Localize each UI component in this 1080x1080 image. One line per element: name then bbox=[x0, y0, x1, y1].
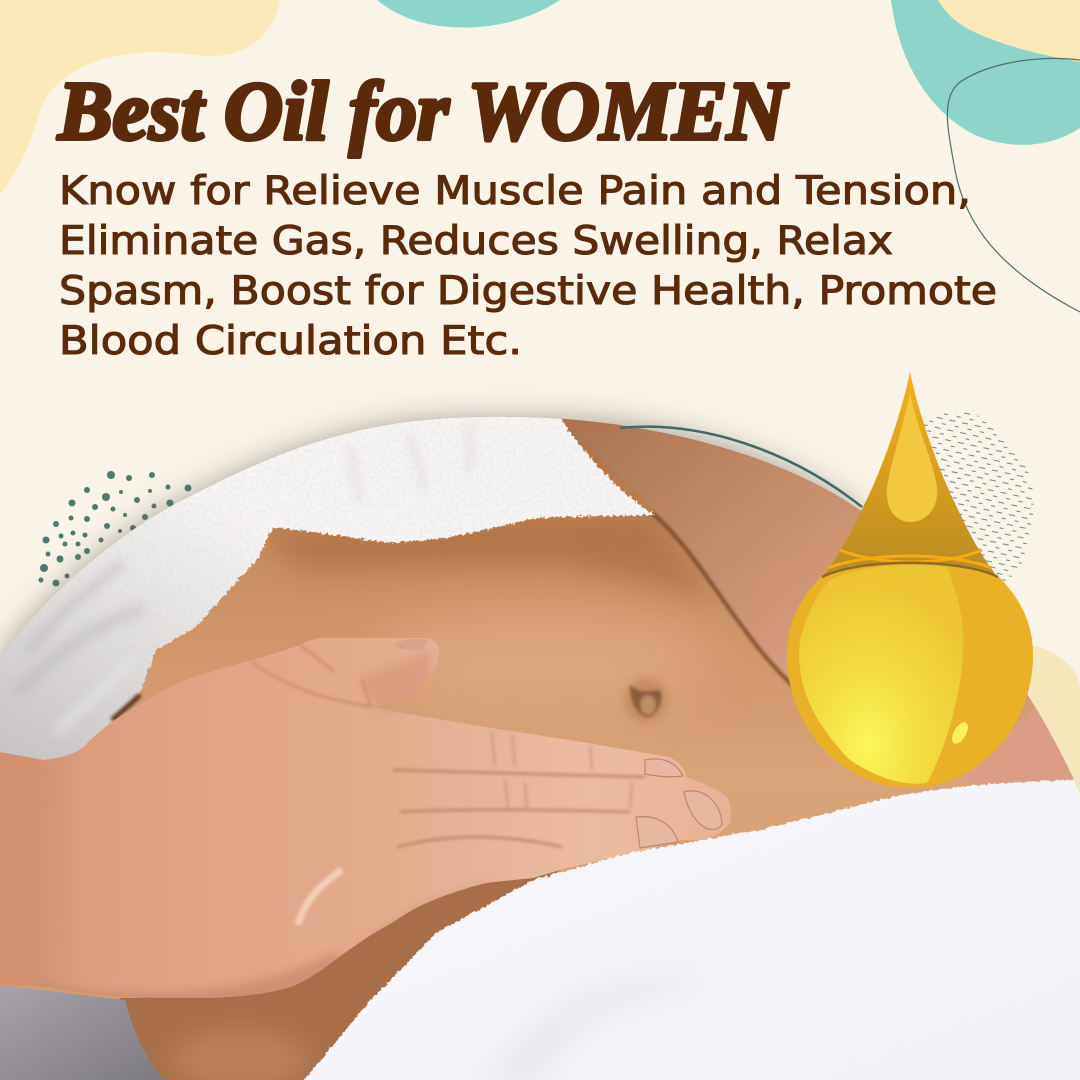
dots: right stipple bbox=[923, 412, 1033, 582]
bottom towel bbox=[300, 780, 1080, 1080]
massaging hand bbox=[0, 630, 740, 1010]
lower belly bbox=[120, 870, 560, 1080]
knuckle creases bbox=[492, 732, 632, 808]
dots: left cluster bbox=[38, 471, 192, 586]
belly glow bbox=[398, 605, 692, 702]
arm crease bbox=[652, 513, 800, 692]
finger nails bbox=[636, 759, 722, 848]
drop body bbox=[787, 562, 1033, 788]
text block: benefits: Eliminate Gas, Reduces Swelling, Relax bbox=[59, 219, 893, 264]
light glint bbox=[949, 720, 971, 746]
drop cone bbox=[822, 371, 998, 578]
raised arm bbox=[562, 418, 861, 678]
navel bbox=[625, 678, 667, 722]
hand shading bbox=[0, 650, 500, 1010]
cone highlight bbox=[887, 393, 937, 522]
photo: abdominal massage bbox=[0, 400, 1080, 1080]
far hand fingers bbox=[963, 705, 1080, 790]
belly bbox=[0, 416, 1080, 1000]
palm and fingers bbox=[0, 630, 740, 1005]
blob: top left yellow bbox=[0, 0, 280, 195]
icon: oil drop bbox=[787, 371, 1033, 788]
thumb nail bbox=[392, 639, 428, 650]
thumb crease bbox=[252, 645, 373, 707]
knuckle scar highlight bbox=[298, 870, 342, 925]
dark arc bbox=[822, 563, 998, 577]
body inner light bbox=[799, 565, 963, 784]
towel folds bbox=[20, 425, 470, 730]
dark gap beside hand bbox=[112, 695, 140, 720]
blob: right yellow behind photo bbox=[1030, 645, 1080, 800]
text block: benefits bbox=[59, 169, 997, 364]
top towel bbox=[0, 400, 655, 775]
belly shade under towel bbox=[260, 515, 720, 600]
finger creases bbox=[393, 770, 645, 847]
blob: top right teal bbox=[891, 0, 1080, 145]
blob: top right yellow bbox=[938, 0, 1080, 62]
collar lines bbox=[828, 550, 992, 568]
blob: top centre teal bbox=[377, 0, 560, 28]
photo shadow bbox=[0, 418, 860, 800]
bottom towel shading bbox=[508, 995, 615, 1076]
text block: benefits: Blood Circulation Etc. bbox=[59, 319, 522, 364]
decorative line: arc over photo bbox=[620, 427, 862, 507]
decorative line: top right bbox=[947, 58, 1080, 312]
lower belly light bbox=[170, 1030, 310, 1080]
text block: benefits: Spasm, Boost for Digestive Health, Promote bbox=[59, 269, 997, 314]
text block: benefits: Know for Relieve Muscle Pain and Tension, bbox=[59, 169, 971, 214]
title: Best Oil for WOMEN bbox=[57, 65, 789, 158]
bottom left sheet bbox=[0, 985, 170, 1080]
